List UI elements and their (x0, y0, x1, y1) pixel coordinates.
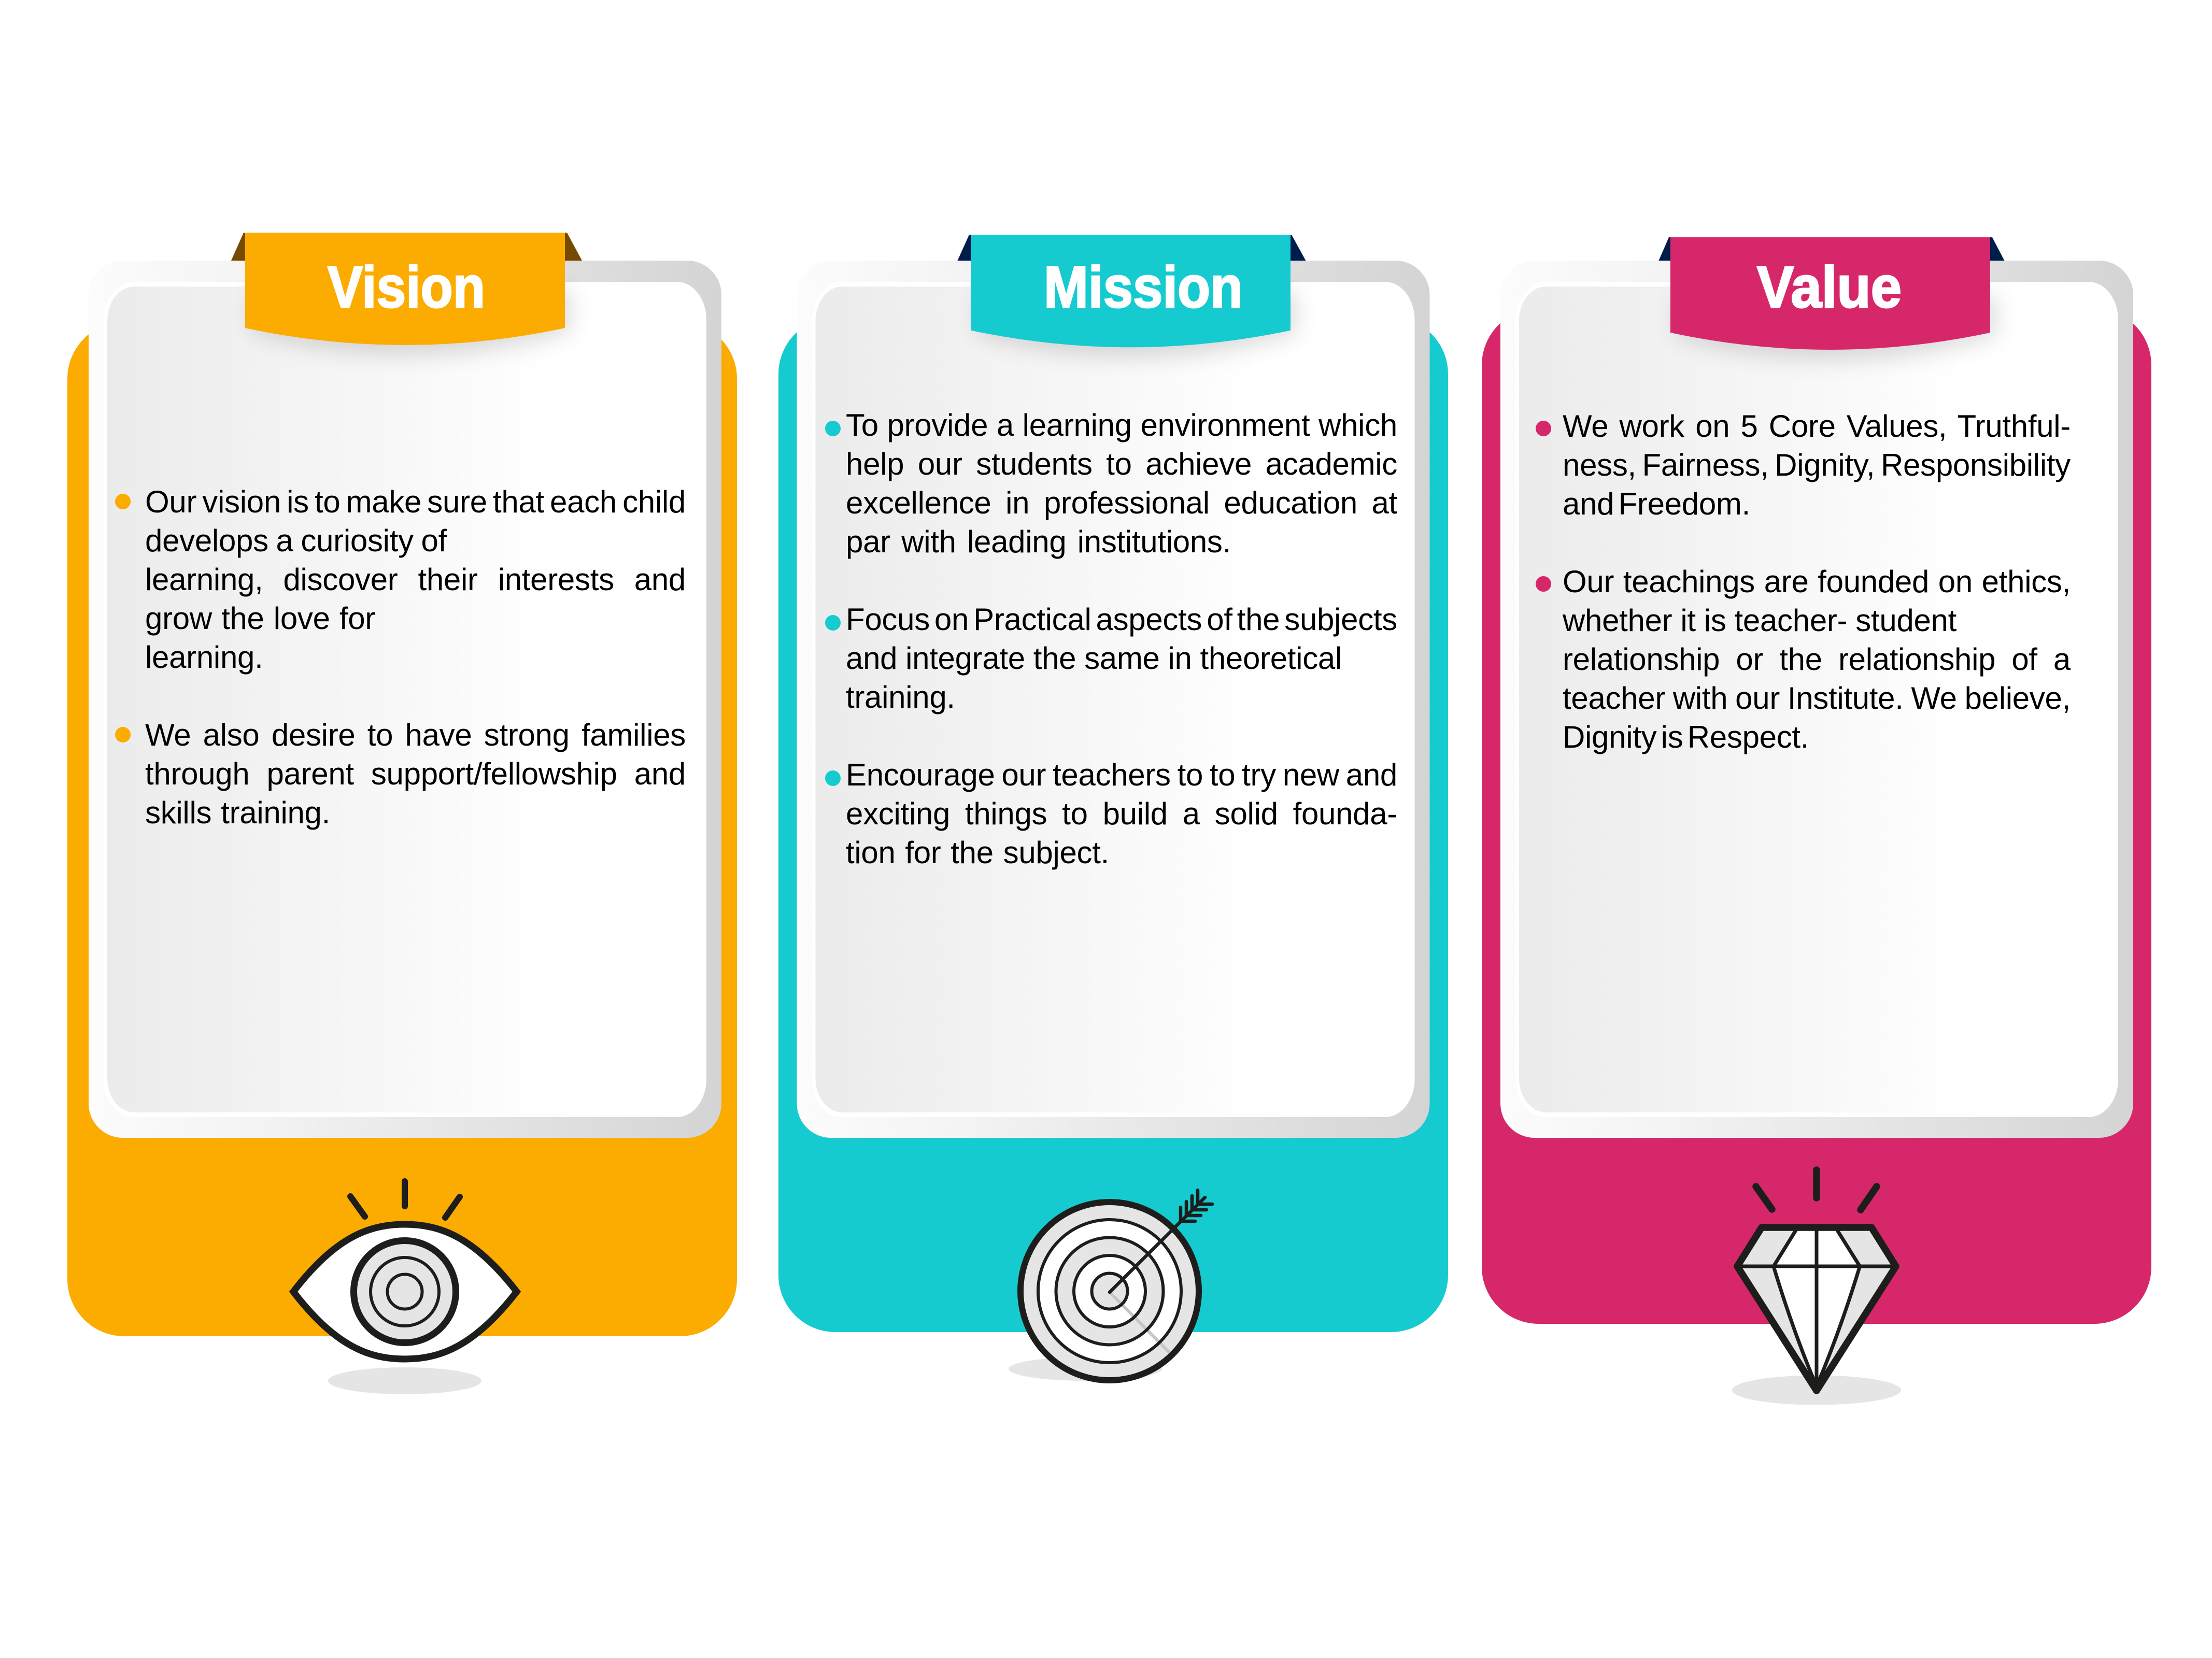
text: value paragraph 1: ness, Fairness, Dignity, Responsibility (1563, 448, 2071, 482)
icon: target with arrow (1020, 1190, 1212, 1380)
text: vision paragraph 1 (145, 484, 686, 675)
text: mission paragraph 2 (846, 600, 1397, 717)
text: value paragraph 2: relationship or the relationship of a (1563, 642, 2071, 677)
white card (797, 261, 1429, 1138)
text: mission paragraph 1: excellence in professional education at (846, 485, 1397, 520)
text: mission paragraph 1: help our students to achieve academic (846, 447, 1397, 481)
text: vision paragraph 1: learning, discover their interests and (145, 562, 686, 597)
bullets (1536, 421, 1551, 592)
ribbon back tabs (957, 235, 1306, 261)
text: vision paragraph 2: through parent support/fellowship and (145, 756, 686, 791)
icon: diamond (1737, 1170, 1896, 1391)
text: value paragraph 1: and Freedom. (1563, 487, 1750, 521)
panel: mission (778, 235, 1448, 1383)
ribbon: Vision heading (245, 233, 565, 345)
white card (89, 261, 721, 1138)
text: mission paragraph 3: Encourage our teachers to to try new and (846, 757, 1397, 792)
white card (1500, 261, 2133, 1138)
text: mission paragraph 1: par with leading institutions. (846, 524, 1231, 559)
text: vision paragraph 1: Our vision is to make sure that each child (145, 484, 686, 519)
text: vision paragraph 1: develops a curiosity of (145, 523, 447, 558)
text: value paragraph 2: teacher with our Institute. We believe, (1563, 681, 2071, 716)
text: mission paragraph 1 (846, 408, 1397, 559)
text: mission paragraph 3 (846, 755, 1397, 872)
ribbon: Mission heading (971, 235, 1291, 347)
text: mission paragraph 2: and integrate the same in theoretical (846, 641, 1342, 676)
icon: target shadow (1009, 1357, 1162, 1381)
panel: vision (67, 233, 737, 1394)
icon: diamond shadow (1732, 1375, 1901, 1405)
panel: value (1482, 237, 2151, 1405)
ribbon shadow (977, 292, 1296, 357)
ribbon back tabs (231, 233, 582, 261)
text: value paragraph 2: Our teachings are founded on ethics, (1563, 564, 2071, 599)
ribbon shadow (1677, 295, 1995, 360)
bullets (115, 494, 131, 742)
text: vision paragraph 2: We also desire to have strong families (145, 718, 686, 752)
coloured backing panel (1482, 308, 2151, 1324)
text: vision paragraph 2: skills training. (145, 795, 330, 830)
text: vision paragraph 1: learning. (145, 640, 263, 675)
ribbon back tabs (1658, 237, 2005, 261)
ribbon: Vision heading: Vision (328, 254, 485, 320)
text: value paragraph 2 (1563, 562, 2071, 756)
coloured backing panel (67, 322, 737, 1336)
bullets (825, 421, 841, 786)
text: vision paragraph 2 (145, 718, 686, 830)
text: mission paragraph 3: exciting things to build a solid founda- (846, 796, 1397, 831)
text: value paragraph 2: Dignity is Respect. (1563, 720, 1809, 754)
text: value paragraph 2: whether it is teacher- student (1563, 603, 1956, 638)
text: value paragraph 1: We work on 5 Core Values, Truthful- (1563, 409, 2071, 444)
ribbon: Value heading: Value (1757, 254, 1902, 320)
ribbon shadow (251, 290, 570, 355)
icon: eye (293, 1181, 517, 1359)
icon: eye shadow (328, 1367, 481, 1394)
text: mission paragraph 3: tion for the subject. (846, 835, 1109, 870)
text: value paragraph 1 (1563, 407, 2071, 523)
coloured backing panel (778, 317, 1448, 1332)
ribbon: Value heading (1670, 237, 1990, 350)
text: mission paragraph 2: Focus on Practical aspects of the subjects (846, 602, 1397, 637)
text: mission paragraph 1: To provide a learning environment which (846, 408, 1397, 442)
ribbon: Mission heading: Mission (1044, 254, 1243, 320)
text: vision paragraph 1: grow the love for (145, 601, 375, 636)
text: mission paragraph 2: training. (846, 680, 955, 714)
